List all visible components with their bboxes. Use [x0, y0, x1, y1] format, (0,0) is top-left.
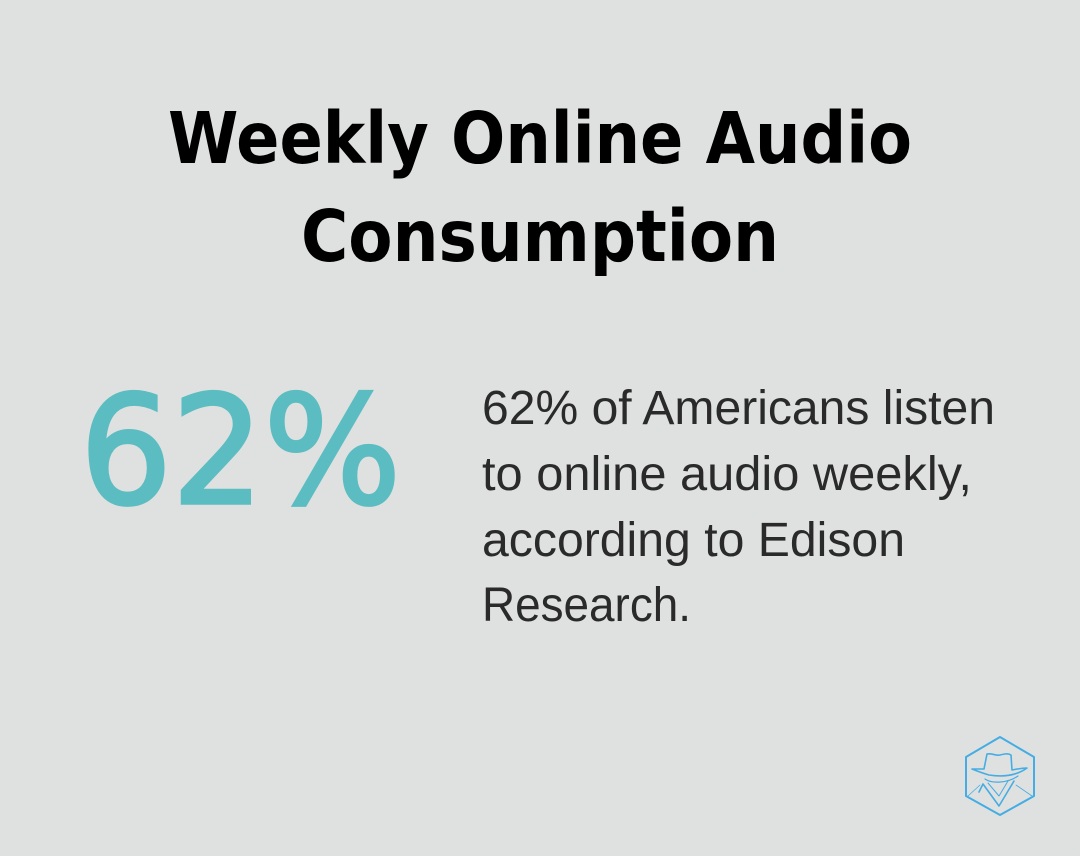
description text: 62% of Americans listen: [482, 382, 995, 435]
title: Weekly Online Audio: [168, 97, 912, 180]
big statistic: 62%: 62%: [80, 365, 401, 539]
description text: to online audio weekly,: [482, 448, 972, 501]
description text: [482, 382, 995, 632]
icon: hexagon logo with hat and coat: [966, 737, 1034, 815]
description text: according to Edison: [482, 514, 905, 567]
title: [168, 97, 912, 278]
description text: Research.: [482, 579, 691, 632]
title: Consumption: [301, 195, 779, 278]
